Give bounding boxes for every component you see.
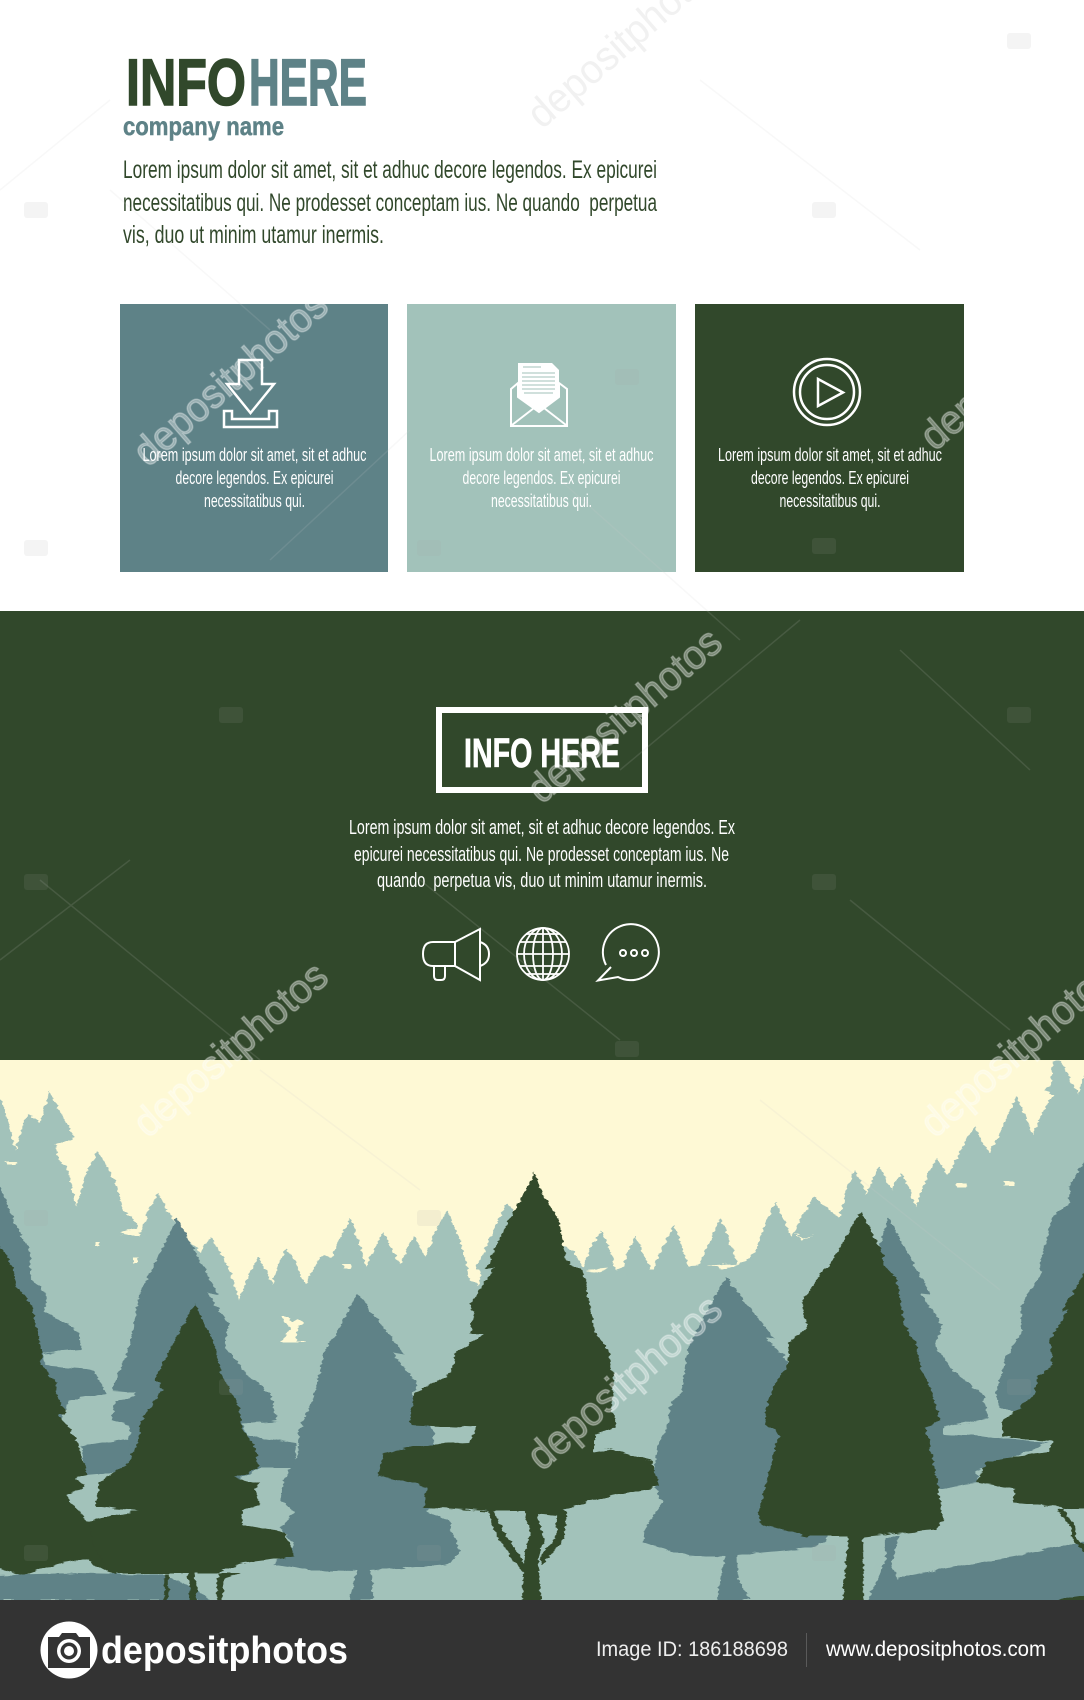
panel: email	[407, 304, 676, 572]
dark foreground trees	[0, 1173, 1084, 1610]
dark tree: right edge	[976, 1264, 1084, 1555]
dark tree: centre big pine	[378, 1173, 659, 1610]
heading box: INFO HERE: INFO HERE	[464, 730, 620, 776]
title: INFO HERE: INFO	[126, 45, 246, 119]
subtitle: company name: company name	[123, 111, 284, 141]
back tree line	[0, 1060, 1084, 1600]
panel: green info band	[0, 611, 1084, 1060]
icon: globe	[517, 928, 569, 980]
cream gaps between back trees	[5, 1161, 1015, 1342]
teal tree: far left	[0, 1173, 107, 1440]
intro paragraph: Lorem ipsum dolor sit amet, sit et adhuc decore legendos. Ex epicurei	[123, 156, 657, 184]
dark tree: far left	[0, 1237, 116, 1575]
band paragraph	[349, 817, 735, 892]
watermark wordmarks: depositphotos	[518, 1285, 731, 1479]
panel text: video	[718, 445, 942, 511]
panel text: video: necessitatibus qui.	[780, 491, 880, 511]
icon: download arrow	[224, 360, 277, 427]
band paragraph: Lorem ipsum dolor sit amet, sit et adhuc decore legendos. Ex	[349, 817, 735, 839]
sky	[0, 1060, 1084, 1600]
icon: megaphone	[423, 929, 489, 980]
watermark wordmarks: depositphotos	[124, 281, 337, 475]
dark tree: centre left	[88, 1303, 295, 1573]
watermark wordmarks	[124, 0, 1084, 1479]
panel text: download: Lorem ipsum dolor sit amet, sit et adhuc	[142, 445, 366, 465]
panel text: email	[430, 445, 654, 511]
panel text: download: decore legendos. Ex epicurei	[176, 468, 334, 488]
dark tree: right big pine	[758, 1211, 943, 1610]
panel text: video: decore legendos. Ex epicurei	[751, 468, 909, 488]
title: INFO HERE: HERE	[249, 45, 367, 119]
dark tree stems, centre left	[164, 1573, 241, 1610]
panel text: email: necessitatibus qui.	[491, 491, 592, 511]
panel text: email: decore legendos. Ex epicurei	[462, 468, 620, 488]
panel: video	[695, 304, 964, 572]
title: INFO HERE	[126, 45, 367, 119]
teal tree: centre	[273, 1293, 460, 1600]
icon: play button	[794, 359, 860, 425]
teal trees	[0, 1153, 1084, 1610]
faint diagonal lines	[0, 80, 1030, 1290]
panel text: email: Lorem ipsum dolor sit amet, sit et adhuc	[430, 445, 654, 465]
teal tree: centre left	[112, 1218, 297, 1480]
heading box: INFO HERE	[439, 710, 645, 790]
band paragraph: quando perpetua vis, duo ut minim utamur inermis.	[377, 870, 707, 892]
intro paragraph: vis, duo ut minim utamur inermis.	[123, 221, 384, 249]
footer bar	[0, 1600, 1084, 1700]
band paragraph: epicurei necessitatibus qui. Ne prodesset conceptam ius. Ne	[354, 844, 729, 866]
footer logo wordmark: depositphotos	[101, 1630, 348, 1672]
teal tree: right edge	[995, 1153, 1084, 1420]
footer image id: Image ID: 186188698	[596, 1638, 788, 1661]
footer logo: camera	[40, 1622, 98, 1678]
panel text: video: Lorem ipsum dolor sit amet, sit et adhuc	[718, 445, 942, 465]
forest illustration	[0, 1060, 1084, 1610]
icon: speech bubble	[598, 924, 659, 980]
intro paragraph	[123, 156, 657, 249]
footer url: www.depositphotos.com	[825, 1638, 1046, 1661]
intro paragraph: necessitatibus qui. Ne prodesset conceptam ius. Ne quando perpetua	[123, 189, 657, 217]
panel text: download	[142, 445, 366, 511]
panel: download	[120, 304, 388, 572]
watermark wordmarks: depositphotos	[518, 618, 731, 812]
icon: envelope with letter	[511, 363, 567, 426]
teal tree: behind right pine	[863, 1217, 1048, 1489]
forest silhouettes, roughened edges	[0, 1060, 1084, 1610]
panel text: download: necessitatibus qui.	[204, 491, 305, 511]
teal tree: centre right	[643, 1277, 828, 1600]
watermark wordmarks: depositphotos	[124, 952, 337, 1146]
